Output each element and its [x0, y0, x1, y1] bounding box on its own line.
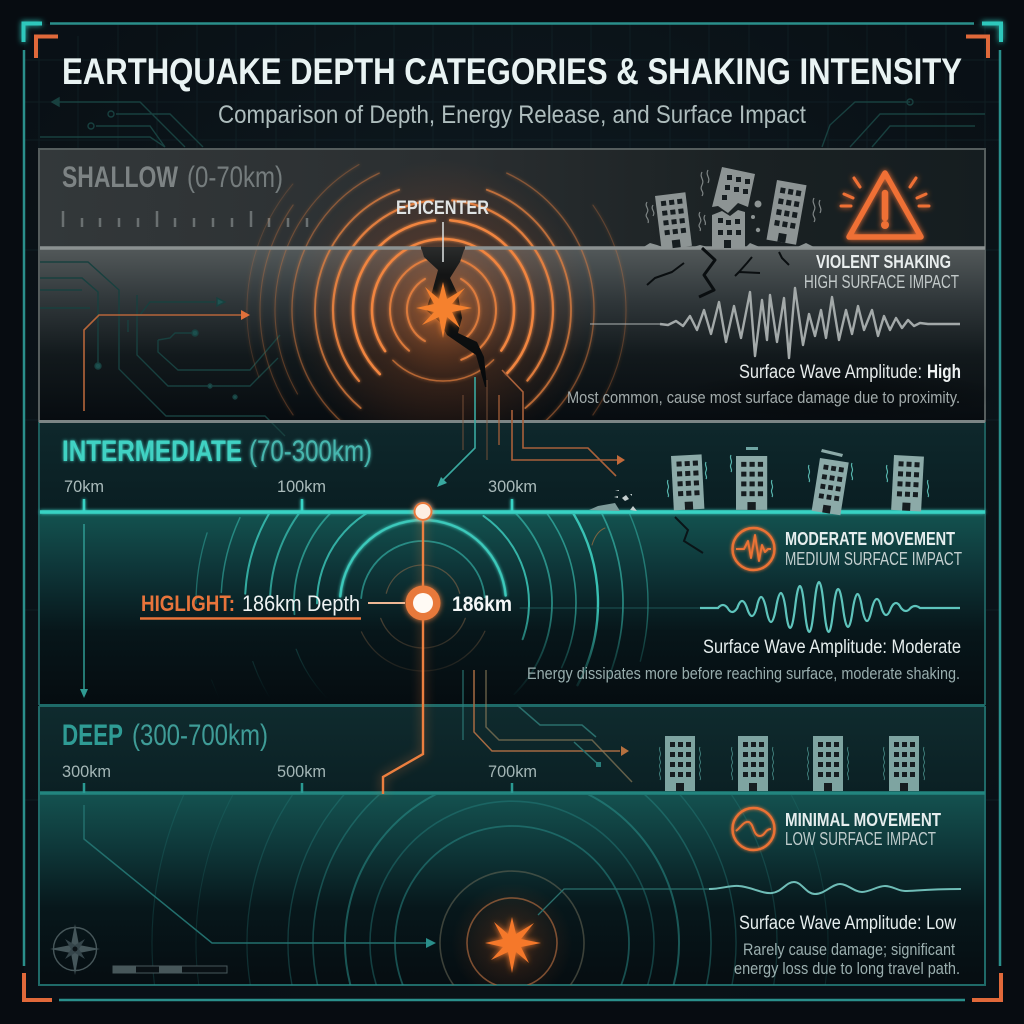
shallow amplitude: Surface Wave Amplitude:	[739, 362, 922, 383]
highlight marker	[406, 586, 440, 620]
deep scale labels: 500km	[277, 762, 326, 781]
epicenter label: EPICENTER	[396, 198, 489, 219]
shallow wave shadow	[680, 369, 1000, 421]
panel divider	[39, 420, 985, 423]
ground cracks	[647, 248, 789, 297]
shallow impact label: VIOLENT SHAKING	[816, 252, 951, 272]
deep seismic rings	[152, 795, 828, 985]
deep scale labels: 300km	[62, 762, 111, 781]
intermediate impact label: MODERATE MOVEMENT	[785, 529, 955, 549]
shallow heading	[62, 161, 283, 194]
intermediate seismic rings	[195, 514, 700, 692]
epicenter burst	[416, 282, 472, 338]
shallow seismograph	[590, 288, 960, 358]
shallow depth ruler	[63, 211, 307, 227]
deep amplitude: Surface Wave Amplitude: Low	[739, 913, 956, 934]
deep wire arrow	[84, 805, 436, 948]
intermediate amplitude: Surface Wave Amplitude: Moderate	[703, 637, 961, 658]
shallow amplitude: High	[927, 362, 961, 383]
epicenter label	[396, 198, 489, 262]
deep scale labels	[62, 762, 537, 781]
intermediate seismograph	[700, 582, 960, 632]
intermediate scale labels: 70km	[64, 477, 104, 496]
shallow seismic rings	[246, 164, 628, 420]
minimal movement icon	[732, 808, 774, 850]
panel divider	[39, 704, 985, 707]
deep heading: (300-700km)	[132, 719, 268, 752]
intermediate impact label	[785, 529, 962, 569]
intermediate scale labels	[64, 477, 537, 496]
deep impact label	[785, 810, 941, 849]
highlight label: 186km Depth	[242, 591, 360, 616]
deep heading	[62, 719, 268, 752]
deep description: Rarely cause damage; significant	[743, 940, 955, 959]
intermediate description: Energy dissipates more before reaching surface, moderate shaking.	[527, 664, 960, 683]
shallow description: Most common, cause most surface damage due to proximity.	[567, 388, 960, 407]
deep surface line	[40, 783, 985, 793]
intermediate scale labels: 100km	[277, 477, 326, 496]
shallow impact label	[804, 252, 959, 292]
highlight label	[140, 591, 405, 618]
deep description	[734, 940, 960, 978]
connecting wires: shallow to intermediate	[437, 370, 625, 487]
moderate movement icon	[732, 528, 774, 570]
scale bar	[113, 966, 227, 973]
connecting wires: intermediate to deep	[463, 670, 632, 782]
intermediate heading: (70-300km)	[249, 435, 372, 468]
subtitle: Comparison of Depth, Energy Release, and Surface Impact	[218, 101, 806, 129]
fault crack	[421, 247, 487, 387]
intermediate scale labels: 300km	[488, 477, 537, 496]
damaged buildings	[642, 167, 821, 249]
corner brackets: teal	[24, 24, 1001, 42]
intermediate impact label: MEDIUM SURFACE IMPACT	[785, 549, 962, 569]
deep burst	[485, 917, 541, 973]
icon: compass	[50, 924, 100, 975]
intermediate surface line	[40, 499, 985, 512]
warning icon	[841, 173, 929, 237]
shallow impact label: HIGH SURFACE IMPACT	[804, 272, 959, 292]
highlight label: HIGLIGHT:	[141, 591, 235, 616]
buildings: deep	[659, 736, 925, 791]
depth value: 186km	[452, 593, 512, 616]
deep scale labels: 700km	[488, 762, 537, 781]
panel: intermediate	[39, 422, 985, 705]
deep impact label: MINIMAL MOVEMENT	[785, 810, 941, 830]
panel: shallow	[39, 149, 985, 421]
intermediate depth arrow	[80, 524, 88, 698]
deep description: energy loss due to long travel path.	[734, 959, 960, 978]
deep seismograph	[709, 882, 961, 894]
buildings: intermediate	[589, 447, 929, 515]
deep impact label: LOW SURFACE IMPACT	[785, 829, 936, 849]
crack: intermediate	[675, 517, 703, 553]
panel: deep	[39, 706, 985, 985]
deep epicenter connector	[538, 889, 709, 915]
shallow energy arrow	[84, 310, 250, 411]
surface marker	[414, 502, 432, 521]
shallow heading: (0-70km)	[187, 161, 283, 194]
depth marker line	[383, 511, 423, 794]
ground surface line	[40, 246, 985, 250]
deep heading: DEEP	[62, 719, 123, 752]
shallow heading: SHALLOW	[62, 161, 179, 194]
background circuit traces	[40, 98, 985, 436]
intermediate heading: INTERMEDIATE	[62, 435, 242, 468]
